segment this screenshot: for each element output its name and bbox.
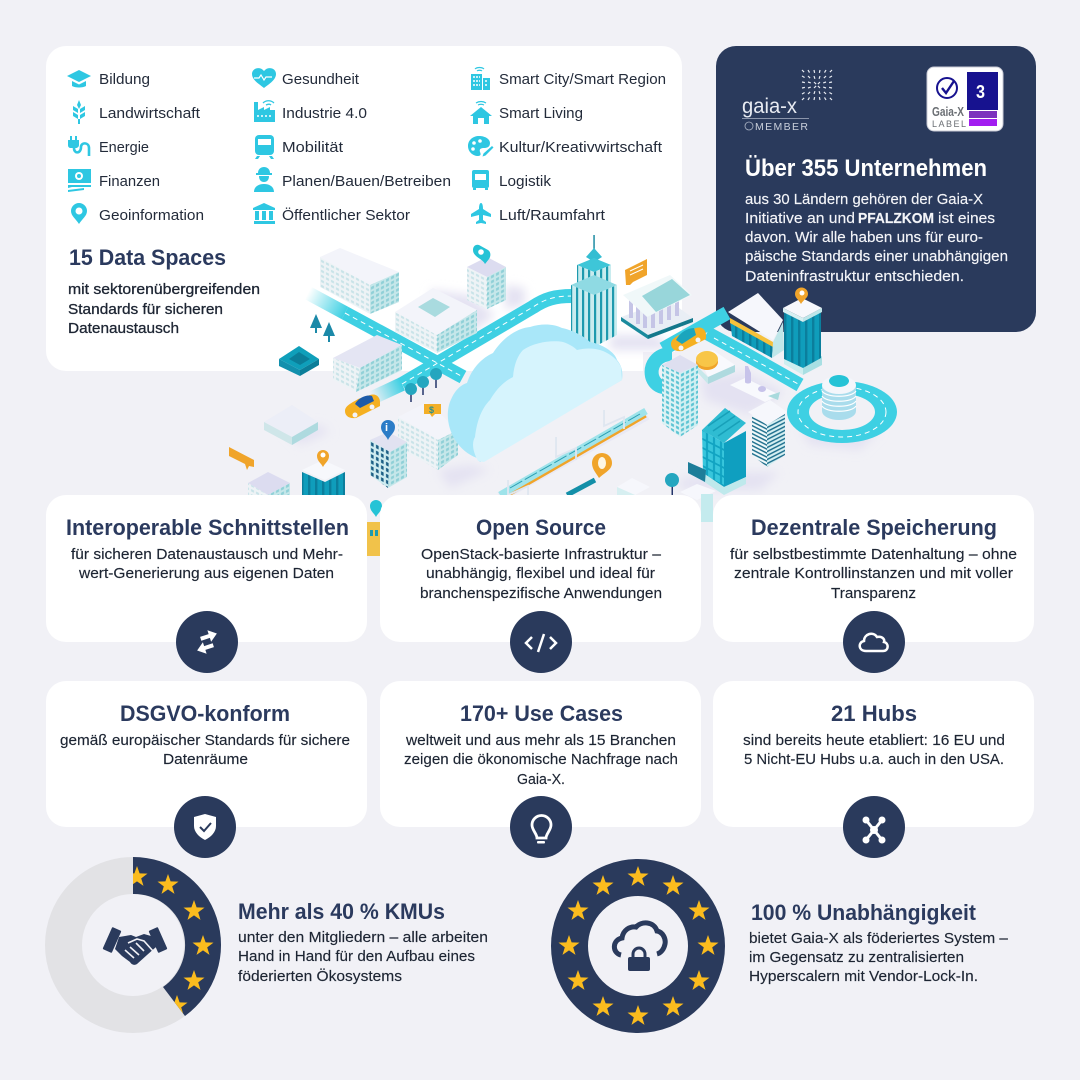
text: membership description: aus 30 Ländern gehören der Gaia-X (745, 191, 983, 208)
card: Dezentrale Speicherung: zentrale Kontrollinstanzen und mit voller (734, 565, 1013, 582)
icon: cloud (843, 611, 905, 673)
item: Kultur/Kreativwirtschaft (468, 136, 663, 156)
item: Geoinformation (71, 203, 204, 224)
text: membership description (745, 191, 1008, 285)
card: DSGVO-konform: DSGVO-konform (120, 701, 290, 726)
item: Kultur/Kreativwirtschaft: Kultur/Kreativwirtschaft (499, 139, 663, 156)
building: pin cube (302, 450, 345, 495)
card: DSGVO-konform (46, 681, 367, 827)
monument plaza (730, 366, 780, 402)
item: Smart City/Smart Region (471, 68, 666, 90)
item: Smart Living (470, 102, 583, 124)
speech bubble: orange top (625, 259, 647, 285)
text: Unabhängigkeit description (749, 930, 1009, 985)
icon: hub network (843, 796, 905, 858)
badge: gaia-x label 3 (927, 67, 1003, 131)
text: KMU description (238, 929, 488, 985)
building: small tower with pin (467, 245, 506, 309)
icon: cloud with lock (614, 923, 665, 971)
logo: gaia-x member: gaia-x (742, 95, 797, 118)
badge: gaia-x label 3: LABEL (932, 119, 966, 129)
building: courtyard block (395, 288, 477, 353)
text: KMU description: föderierten Ökosystems (238, 967, 402, 985)
building: low with dollar sign (398, 402, 458, 470)
text: data spaces description: Datenaustausch (68, 320, 179, 337)
text: membership description: päische Standards einer unabhängigen (745, 248, 1008, 265)
card: Interoperable Schnittstellen: wert-Generierung aus eigenen Daten (78, 565, 334, 582)
text: membership description: ist eines (938, 210, 995, 227)
card: Interoperable Schnittstellen (46, 495, 367, 642)
card: Open Source: Open Source (476, 515, 606, 540)
item: Geoinformation: Geoinformation (99, 207, 204, 224)
item: Industrie 4.0: Industrie 4.0 (282, 105, 367, 122)
building: large office (320, 248, 399, 314)
item: Landwirtschaft: Landwirtschaft (99, 105, 201, 122)
card: 170+ Use Cases: 170+ Use Cases (460, 701, 623, 726)
item: Planen/Bauen/Betreiben: Planen/Bauen/Betreiben (282, 173, 451, 190)
card: Interoperable Schnittstellen: Interoperable Schnittstellen (66, 515, 349, 540)
trees (310, 314, 335, 342)
text: Unabhängigkeit description: im Gegensatz zu zentralisierten (749, 949, 964, 966)
item: Smart City/Smart Region: Smart City/Smart Region (499, 71, 666, 88)
text: data spaces description: Standards für sicheren (68, 301, 223, 318)
item: Landwirtschaft (73, 100, 201, 124)
item: Logistik: Logistik (499, 173, 552, 190)
speech bubble: orange left (229, 447, 254, 470)
item: Gesundheit: Gesundheit (282, 71, 360, 88)
item: Öffentlicher Sektor: Öffentlicher Sektor (282, 206, 410, 224)
logo: gaia-x member: MEMBER (755, 121, 808, 133)
card: 21 Hubs: sind bereits heute etabliert: 16 EU und (743, 732, 1005, 749)
text: membership description: Dateninfrastruktur entschieden. (745, 268, 964, 285)
item: Energie (68, 136, 149, 156)
item: Bildung (67, 70, 150, 88)
heading: Mehr als 40 % KMUs: Mehr als 40 % KMUs (238, 899, 445, 924)
card: Open Source: OpenStack-basierte Infrastruktur – (421, 546, 662, 563)
card: 21 Hubs: 21 Hubs (831, 701, 917, 726)
skyscraper (571, 235, 617, 347)
text: Unabhängigkeit description: Hyperscalern mit Vendor-Lock-In. (749, 968, 978, 985)
text: KMU description: unter den Mitgliedern – alle arbeiten (238, 929, 488, 946)
card: Dezentrale Speicherung (713, 495, 1034, 642)
item: Luft/Raumfahrt: Luft/Raumfahrt (499, 207, 606, 224)
heading: Über 355 Unternehmen: Über 355 Unternehmen (745, 155, 987, 182)
card: 21 Hubs: 5 Nicht-EU Hubs u.a. auch in den USA. (744, 751, 1004, 768)
icon: light bulb (510, 796, 572, 858)
item: Finanzen: Finanzen (99, 173, 160, 190)
card: Interoperable Schnittstellen: für sicheren Datenaustausch und Mehr- (71, 546, 343, 563)
card: Dezentrale Speicherung: Dezentrale Speicherung (751, 515, 997, 540)
building: white tower (662, 355, 698, 437)
icon: exchange arrows (176, 611, 238, 673)
text: membership description: davon. Wir alle haben uns für euro- (745, 229, 983, 246)
train (500, 410, 647, 500)
logo: gaia-x member (742, 70, 832, 133)
card: Open Source: branchenspezifische Anwendungen (420, 585, 662, 602)
card: 21 Hubs (713, 681, 1034, 827)
panel row 1: feature cards (46, 495, 1034, 642)
building: tower with info pin: i (385, 422, 388, 434)
card: Open Source: unabhängig, flexibel und ideal für (426, 565, 655, 582)
sliver: pin and building in gutter (367, 500, 382, 556)
heading: 15 Data Spaces: 15 Data Spaces (69, 245, 226, 270)
item: Smart Living: Smart Living (499, 105, 583, 122)
cloud (448, 324, 622, 462)
roads (308, 293, 800, 398)
text: Unabhängigkeit description: bietet Gaia-X als föderiertes System – (749, 930, 1009, 947)
building: tower with info pin (370, 420, 407, 488)
item: Energie: Energie (99, 139, 149, 156)
bottom right small items (617, 462, 716, 522)
panel: data spaces (46, 46, 688, 374)
icon: shield check (174, 796, 236, 858)
card: Dezentrale Speicherung: für selbstbestimmte Datenhaltung – ohne (730, 546, 1017, 563)
text: data spaces description (68, 281, 260, 337)
card: Open Source (380, 495, 701, 642)
item: Planen/Bauen/Betreiben (254, 167, 451, 192)
item: Mobilität: Mobilität (282, 139, 344, 156)
item: Luft/Raumfahrt (471, 203, 606, 224)
road ring with tower (787, 375, 897, 443)
text: data spaces description: mit sektorenübergreifenden (68, 281, 260, 298)
building: striped white tower (748, 400, 787, 467)
building: low with dollar sign: $ (429, 405, 434, 415)
trees: row (405, 368, 442, 402)
item: Industrie 4.0 (254, 101, 367, 122)
panel row 2: feature cards (46, 681, 1034, 827)
box: teal data block (279, 346, 319, 376)
chart: 100 percent ring with stars (558, 866, 718, 1025)
car: yellow left (345, 394, 380, 418)
item: Logistik (472, 170, 552, 190)
slab building (264, 405, 318, 445)
building: tall teal tower with pin (783, 288, 822, 375)
building: low with awning (728, 293, 784, 358)
illustration: isometric smart city (229, 235, 897, 556)
item: Gesundheit (252, 68, 360, 88)
item: Mobilität (255, 135, 344, 159)
card: 170+ Use Cases: zeigen die ökonomische Nachfrage nach (404, 751, 678, 768)
icon: handshake (103, 927, 167, 965)
plaza: coin (696, 350, 735, 384)
card: DSGVO-konform: Datenräume (163, 751, 248, 768)
card: 170+ Use Cases: weltweit und aus mehr als 15 Branchen (405, 732, 676, 749)
building: lower office (333, 335, 402, 392)
panel: gaia-x membership (716, 46, 1036, 332)
text: membership description: Initiative an und (745, 210, 855, 227)
shadows (285, 285, 880, 490)
temple building (621, 275, 693, 339)
icon: code brackets (510, 611, 572, 673)
card: 170+ Use Cases: Gaia-X. (517, 771, 565, 788)
card: Dezentrale Speicherung: Transparenz (831, 585, 916, 602)
item: Bildung: Bildung (99, 71, 150, 88)
building: blue block (702, 408, 746, 495)
item: Finanzen (68, 169, 160, 192)
card: DSGVO-konform: gemäß europäischer Standards für sichere (60, 732, 350, 749)
item: Öffentlicher Sektor (253, 203, 410, 224)
card: 170+ Use Cases (380, 681, 701, 827)
list: data space sectors (67, 68, 666, 224)
car: yellow right (671, 327, 706, 351)
building: bottom left (248, 472, 290, 495)
badge: gaia-x label 3: Gaia-X (932, 104, 964, 119)
chart: 40 percent donut (64, 857, 221, 1016)
badge: gaia-x label 3: 3 (976, 82, 985, 102)
pin: orange large (567, 453, 612, 495)
text: KMU description: Hand in Hand für den Aufbau eines (238, 948, 475, 965)
text: membership description: PFALZKOM (858, 210, 934, 227)
heading: 100 % Unabhängigkeit: 100 % Unabhängigkeit (751, 900, 977, 925)
